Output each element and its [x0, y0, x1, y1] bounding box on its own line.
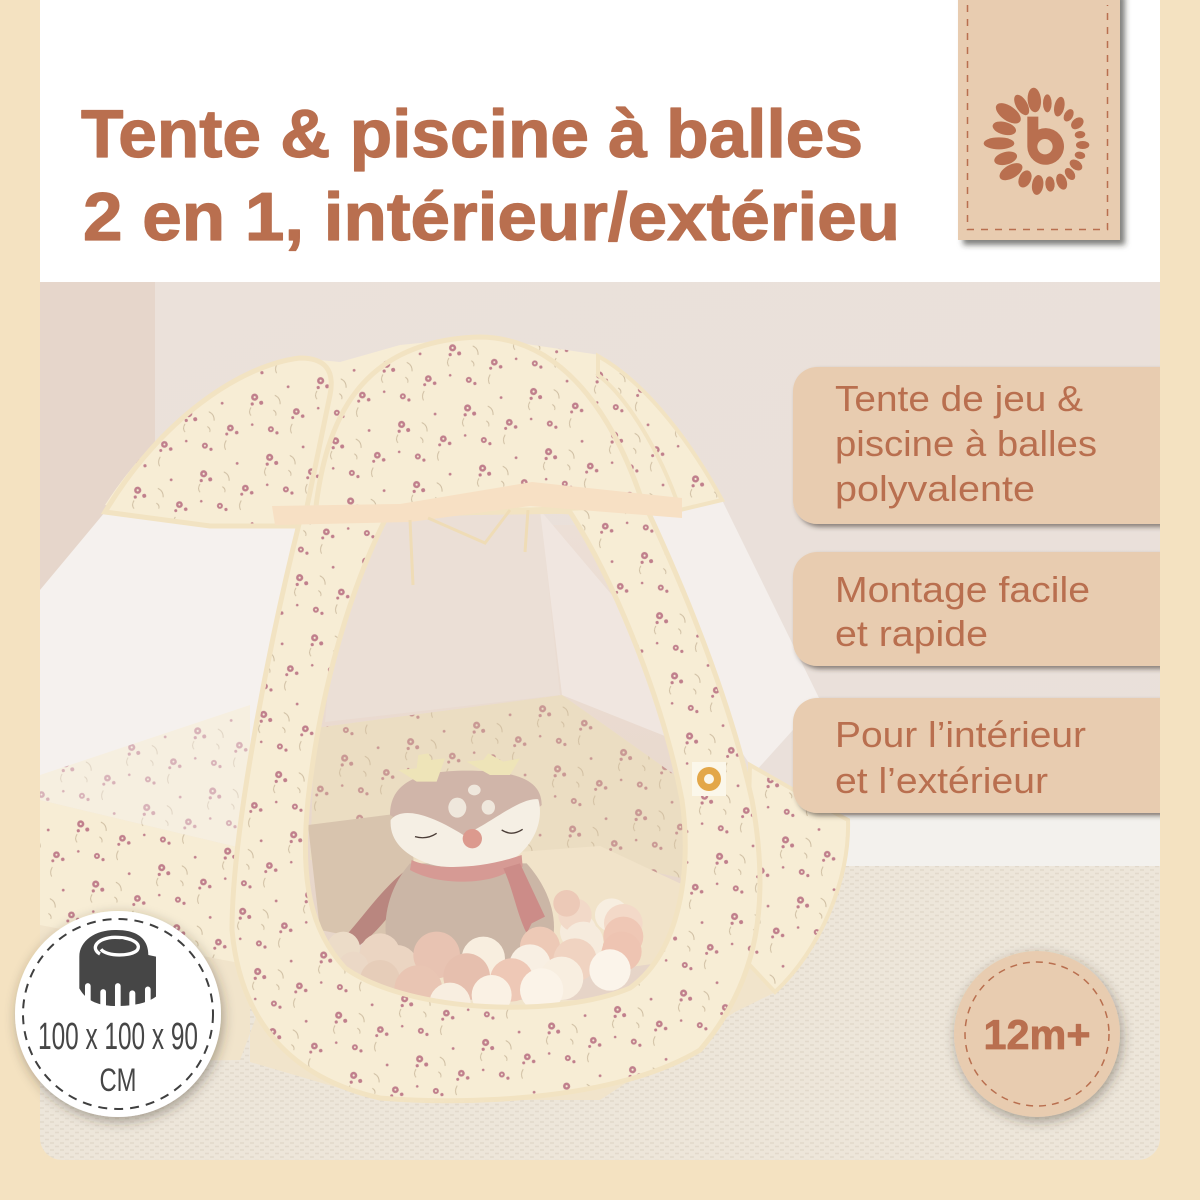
- icon: brand logo: [984, 87, 1089, 196]
- dome backing fabric: [105, 342, 673, 506]
- right page border: [1160, 282, 1200, 1200]
- left upper floral panel: [105, 358, 331, 526]
- wall: [155, 282, 1160, 815]
- plush deer: [345, 753, 554, 963]
- tent floor skirt: [40, 925, 773, 1100]
- right mesh window: [640, 500, 820, 772]
- title: Tente & piscine à balles: [81, 96, 863, 172]
- brand tag: [958, 0, 1120, 240]
- feature card 3: Pour l’intérieur: [835, 714, 1086, 755]
- feature card 2: [793, 552, 1200, 666]
- left lower floral panel: [40, 800, 250, 965]
- left wall section: [40, 282, 155, 590]
- feature card 2: et rapide: [835, 613, 988, 654]
- size badge: 100 x 100 x 90: [38, 1016, 198, 1058]
- age badge: 12m+: [984, 1011, 1090, 1058]
- interior floor: [414, 846, 680, 984]
- photo: tent in room: [40, 282, 1160, 1160]
- left mesh window: [40, 512, 310, 850]
- feature card 1: piscine à balles: [835, 423, 1097, 464]
- tent: [40, 337, 848, 1101]
- title: [81, 96, 900, 255]
- feature card 3: et l’extérieur: [835, 760, 1048, 801]
- age badge: [954, 951, 1120, 1117]
- right upper floral panel: [598, 356, 722, 510]
- centre upper floral panel: [315, 337, 645, 515]
- feature card 3: [793, 698, 1200, 813]
- ties: [410, 510, 528, 585]
- feature card 1: [793, 367, 1200, 524]
- tent label: [692, 762, 726, 796]
- feature card 1: Tente de jeu &: [835, 378, 1083, 419]
- front floral panel with door opening: [232, 505, 760, 1101]
- size badge: CM: [100, 1062, 136, 1098]
- interior back wall: [308, 653, 681, 1000]
- feature card 2: Montage facile: [835, 569, 1090, 610]
- header panel: [40, 0, 1160, 282]
- right lower floral panel: [745, 765, 848, 992]
- cushion: [308, 814, 414, 936]
- interior floral walls: [310, 695, 690, 880]
- icon: tape measure: [79, 930, 156, 1008]
- feature card 1: polyvalente: [835, 468, 1035, 509]
- back mesh: [452, 515, 473, 516]
- balls: [336, 890, 644, 1005]
- title: 2 en 1, intérieur/extérieu: [83, 179, 900, 255]
- baseboard: [844, 815, 1160, 866]
- roll-up bar: [272, 482, 682, 525]
- size badge: [15, 911, 221, 1117]
- rug: [40, 866, 1160, 1160]
